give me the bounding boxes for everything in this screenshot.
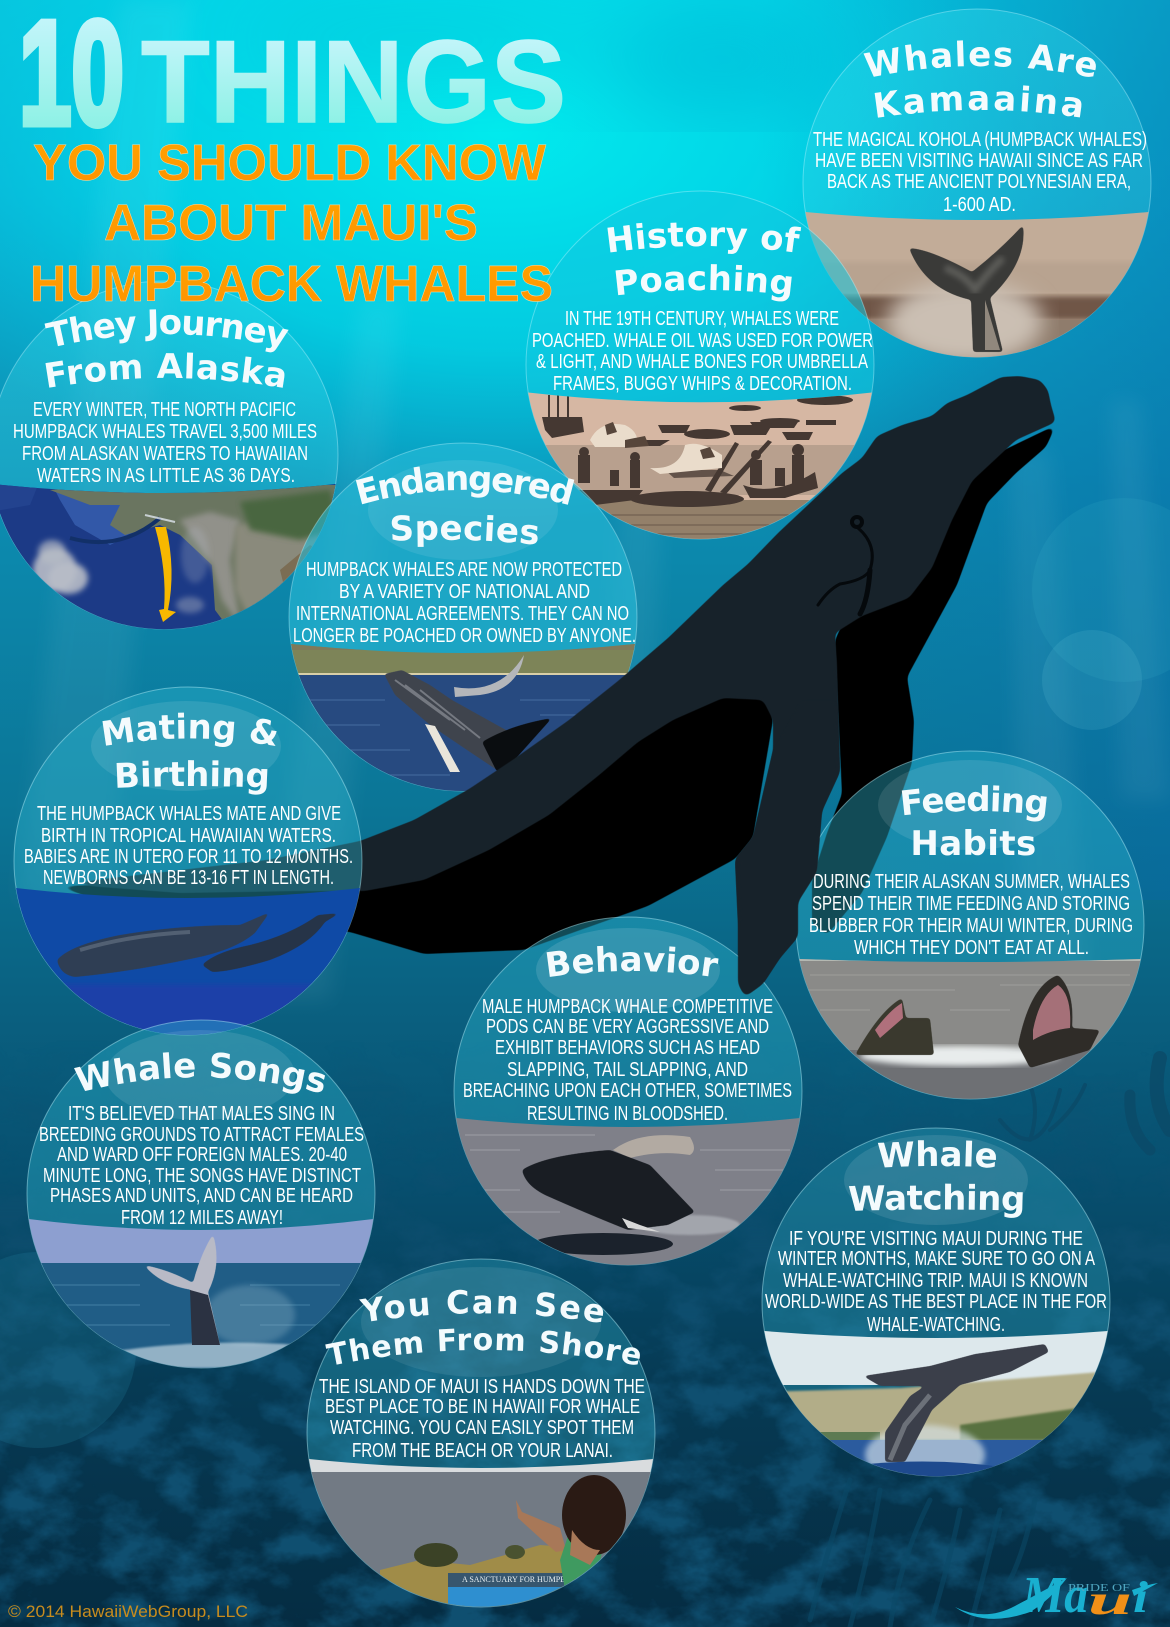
heading line 2: Watching: [848, 1178, 1025, 1220]
body text: BREACHING UPON EACH OTHER, SOMETIMES: [463, 1080, 792, 1102]
dorsal fin lobe: [482, 718, 552, 772]
panel: Whales Are Kamaaina: [802, 8, 1152, 358]
body text: LONGER BE POACHED OR OWNED BY ANYONE.: [293, 625, 636, 647]
body text: IN THE 19TH CENTURY, WHALES WERE: [565, 308, 839, 330]
heading: History of: [607, 222, 802, 254]
body text: RESULTING IN BLOODSHED.: [527, 1103, 728, 1125]
subtitle: YOU SHOULD KNOW: [33, 134, 547, 191]
body text: MINUTE LONG, THE SONGS HAVE DISTINCT: [43, 1165, 361, 1187]
heading: Whale Songs: [74, 1052, 325, 1094]
body text: WATERS IN AS LITTLE AS 36 DAYS.: [37, 465, 295, 487]
subtitle: [30, 134, 553, 312]
logo: Pride of Maui: i: [1133, 1573, 1149, 1622]
body text: [813, 129, 1147, 216]
heading: Endangered: [356, 466, 574, 505]
body text: [39, 1103, 364, 1229]
heading: Whales Are: [864, 40, 1096, 77]
body text: SLAPPING, TAIL SLAPPING, AND: [507, 1059, 748, 1081]
body text: PHASES AND UNITS, AND CAN BE HEARD: [50, 1185, 353, 1207]
body text: [463, 996, 792, 1125]
body text: IT'S BELIEVED THAT MALES SING IN: [68, 1103, 335, 1125]
heading line 2: Birthing: [116, 760, 268, 795]
panel: Whale Songs: [26, 1020, 376, 1368]
logo: Pride of Maui: u: [1088, 1578, 1132, 1624]
photo: boy pointing at the sea: [305, 1455, 657, 1612]
body text: IF YOU'RE VISITING MAUI DURING THE: [789, 1228, 1083, 1250]
body text: POACHED. WHALE OIL WAS USED FOR POWER: [532, 330, 873, 352]
panel: Feeding Habits: [750, 750, 1144, 1150]
body text: FROM THE BEACH OR YOUR LANAI.: [352, 1440, 613, 1462]
body text: [24, 803, 353, 889]
panel: Behavior: [454, 916, 846, 1266]
whale silhouette: body and belly: [55, 376, 1056, 997]
body text: BEST PLACE TO BE IN HAWAII FOR WHALE: [325, 1396, 640, 1418]
photo: breaching whale over blue sea: [285, 640, 640, 795]
body text: WHICH THEY DON'T EAT AT ALL.: [854, 937, 1089, 959]
panel: Mating and Birthing: [14, 686, 362, 1036]
photo: lunge feeding whales: [799, 959, 1141, 1099]
body text: THE HUMPBACK WHALES MATE AND GIVE: [37, 803, 341, 825]
logo: Pride of Maui: Ma: [1021, 1567, 1088, 1624]
heading: They Journey: [44, 309, 289, 352]
subtitle: HUMPBACK WHALES: [30, 255, 553, 312]
main body: [60, 376, 1056, 997]
heading: Whale: [878, 1140, 996, 1168]
body text: WATCHING. YOU CAN EASILY SPOT THEM: [330, 1417, 634, 1439]
photo: boy pointing at the sea: A SANCTUARY FOR HUMPBACK WHALES: [462, 1575, 618, 1584]
body text: WHALE-WATCHING.: [867, 1314, 1005, 1336]
body text: FROM ALASKAN WATERS TO HAWAIIAN: [22, 443, 308, 465]
heading: Behavior: [546, 946, 718, 977]
body text: [319, 1376, 645, 1462]
heading line 2: Species: [392, 515, 538, 547]
body text: 1-600 AD.: [943, 194, 1016, 216]
photo: satellite map with arrow: [0, 480, 340, 630]
heading: Mating &: [102, 712, 277, 747]
body text: FRAMES, BUGGY WHIPS & DECORATION.: [553, 373, 852, 395]
body text: [13, 399, 317, 487]
title word THINGS: THINGS: [141, 16, 566, 147]
photo: breaching whale near shoreline: [764, 1331, 1108, 1476]
photo: engraving of whaling boats: [525, 388, 875, 545]
body text: BIRTH IN TROPICAL HAWAIIAN WATERS.: [41, 825, 336, 847]
body text: MALE HUMPBACK WHALE COMPETITIVE: [482, 996, 773, 1018]
panel: Endangered Species: [288, 442, 638, 792]
photo: whale tail in sepia: [805, 212, 1149, 358]
belly: [55, 690, 773, 954]
photo: whale tail at sea: [25, 1215, 380, 1368]
body text: [293, 559, 636, 647]
body text: HUMPBACK WHALES TRAVEL 3,500 MILES: [13, 421, 317, 443]
body text: [809, 871, 1133, 959]
panel: Whale Watching: [720, 1088, 1110, 1476]
photo: whale breaching in grey sea: [456, 1118, 800, 1265]
body text: [532, 308, 873, 395]
body text: INTERNATIONAL AGREEMENTS. THEY CAN NO: [296, 603, 629, 625]
panel: You Can See Them From Shore: [305, 1259, 657, 1612]
heading line 2: From Alaska: [46, 352, 284, 388]
heading: You Can See: [357, 1283, 610, 1331]
body text: THE ISLAND OF MAUI IS HANDS DOWN THE: [319, 1376, 645, 1398]
body text: HUMPBACK WHALES ARE NOW PROTECTED: [306, 559, 622, 581]
heading line 2: Habits: [914, 829, 1035, 856]
heading line 2: Them From Shore: [324, 1323, 646, 1374]
body text: FROM 12 MILES AWAY!: [121, 1207, 283, 1229]
body text: BY A VARIETY OF NATIONAL AND: [339, 581, 590, 603]
photo: whale and calf underwater: [16, 888, 360, 1035]
logo: Pride of Maui: PRIDE OF: [1068, 1583, 1131, 1594]
body text: EXHIBIT BEHAVIORS SUCH AS HEAD: [495, 1037, 760, 1059]
body text: [765, 1228, 1107, 1336]
panel: They Journey From Alaska: [0, 280, 338, 630]
heading line 2: Poaching: [616, 264, 792, 302]
whale flipper over the Behavior panel: [735, 700, 840, 997]
whale body mark: [818, 517, 872, 614]
copyright: © 2014 HawaiiWebGroup, LLC: [8, 1602, 248, 1621]
title: [19, 0, 566, 312]
body text: & LIGHT, AND WHALE BONES FOR UMBRELLA: [536, 351, 868, 373]
body text: EVERY WINTER, THE NORTH PACIFIC: [33, 399, 296, 421]
body text: PODS CAN BE VERY AGGRESSIVE AND: [486, 1016, 769, 1038]
heading: Feeding: [902, 785, 1047, 822]
logo: Pride of Maui: [955, 1567, 1158, 1624]
panel: History of Poaching: [526, 190, 874, 540]
body text: AND WARD OFF FOREIGN MALES. 20-40: [57, 1144, 347, 1166]
body text: NEWBORNS CAN BE 13-16 FT IN LENGTH.: [43, 867, 334, 889]
icon: yellow arrow: [155, 527, 176, 622]
body text: BREEDING GROUNDS TO ATTRACT FEMALES: [39, 1124, 364, 1146]
subtitle: ABOUT MAUI'S: [104, 194, 478, 251]
body text: BABIES ARE IN UTERO FOR 11 TO 12 MONTHS.: [24, 846, 353, 868]
back pectoral fin: [812, 425, 1056, 935]
heading line 2: Kamaaina: [874, 85, 1082, 118]
